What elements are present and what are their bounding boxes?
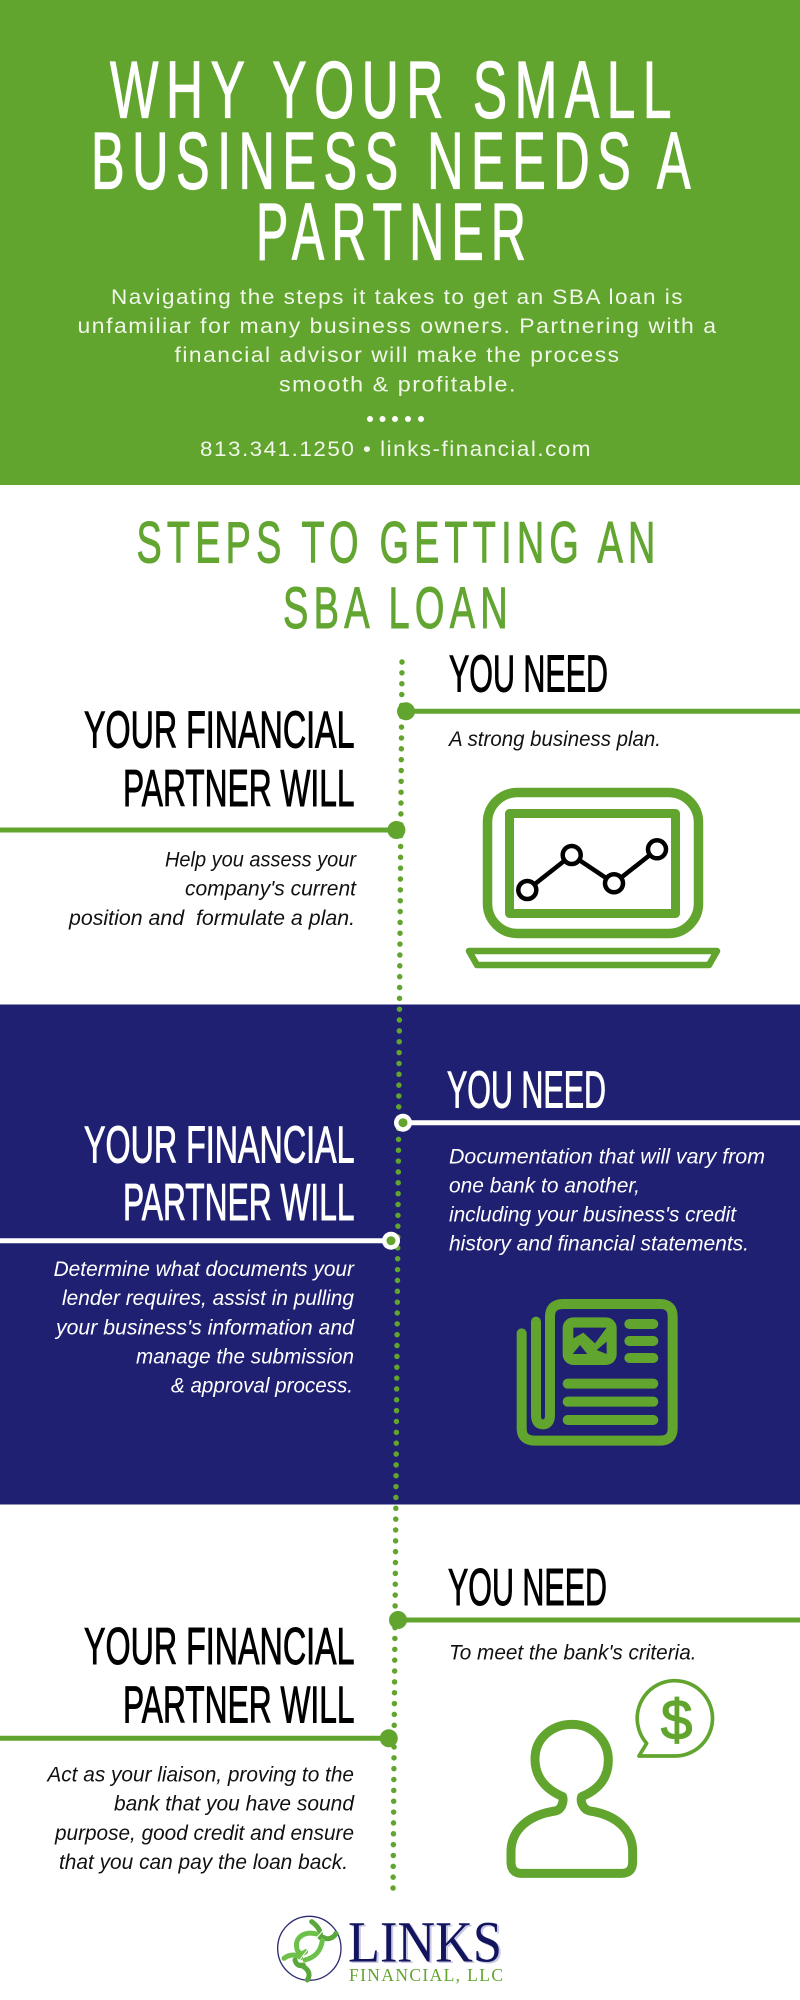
- intro text: [78, 286, 717, 396]
- step 3: your financial partner will: bank that you have sound: [114, 1792, 355, 1816]
- step 3: your financial partner will: PARTNER WILL: [123, 1676, 354, 1734]
- step 3: you need: [389, 1559, 800, 1664]
- step 2: you need: Documentation that will vary from: [449, 1144, 765, 1168]
- logo wordmark: LINKS: [350, 1911, 504, 1976]
- step 1: your financial partner will: [0, 702, 405, 930]
- step 2: your financial partner will: Determine what documents your: [54, 1257, 355, 1281]
- step 1: you need: A strong business plan.: [447, 727, 661, 751]
- step 1: your financial partner will: position and formulate a plan.: [68, 906, 355, 930]
- icon: person with dollar speech bubble: $: [661, 1689, 692, 1752]
- intro text: smooth & profitable.: [279, 374, 517, 396]
- step 2: you need: including your business's credit: [449, 1203, 737, 1227]
- step 3: your financial partner will: Act as your liaison, proving to the: [45, 1763, 354, 1787]
- icon: newspaper document: [522, 1304, 673, 1441]
- intro text: unfamiliar for many business owners. Partnering with a: [78, 315, 717, 338]
- intro text: Navigating the steps it takes to get an SBA loan is: [111, 286, 684, 309]
- step 1: you need: YOU NEED: [449, 646, 608, 704]
- step 2: your financial partner will: & approval process.: [171, 1374, 353, 1398]
- title: [91, 46, 698, 278]
- section heading: [136, 510, 660, 641]
- icon: person with dollar speech bubble: [511, 1681, 713, 1873]
- step 1: your financial partner will: PARTNER WILL: [123, 760, 354, 818]
- dot divider: [367, 416, 424, 422]
- logo: Links Financial: LINKS: [348, 1910, 502, 1975]
- step 2: your financial partner will: YOUR FINANCIAL: [84, 1116, 354, 1174]
- title: PARTNER: [256, 188, 533, 278]
- step 2: you need: YOU NEED: [447, 1061, 606, 1119]
- step 3: your financial partner will: purpose, good credit and ensure: [54, 1821, 354, 1845]
- step 1: your financial partner will: company's current: [185, 876, 357, 900]
- intro text: financial advisor will make the process: [174, 344, 620, 367]
- step 2: your financial partner will: lender requires, assist in pulling: [62, 1286, 354, 1310]
- step 1: your financial partner will: Help you assess your: [165, 848, 357, 872]
- step 2: you need: [394, 1061, 800, 1256]
- contact line: 813.341.1250 • links-financial.com: [200, 438, 592, 461]
- step 1: you need: [397, 646, 800, 751]
- logo: Links Financial: FINANCIAL, LLC: [349, 1965, 503, 1985]
- step 2: your financial partner will: your business's information and: [54, 1315, 355, 1339]
- step 3: your financial partner will: [0, 1618, 398, 1874]
- step 3: your financial partner will: YOUR FINANCIAL: [84, 1618, 354, 1676]
- step 2: you need: one bank to another,: [449, 1174, 640, 1198]
- logo chain emblem: [278, 1916, 341, 1980]
- dotted timeline: [393, 662, 402, 1896]
- step 3: your financial partner will: that you can pay the loan back.: [59, 1850, 348, 1874]
- step 2: your financial partner will: PARTNER WILL: [123, 1174, 354, 1232]
- icon: laptop with chart: [469, 792, 717, 965]
- step 3: you need: To meet the bank's criteria.: [449, 1640, 696, 1664]
- panel: header banner: [0, 0, 800, 485]
- panel: navy step background: [0, 1004, 800, 1504]
- step 2: your financial partner will: [0, 1116, 400, 1398]
- logo: Links Financial: [278, 1910, 504, 1985]
- step 2: your financial partner will: manage the submission: [136, 1344, 354, 1368]
- step 1: your financial partner will: YOUR FINANCIAL: [84, 702, 354, 760]
- step 2: you need: history and financial statements.: [449, 1232, 749, 1256]
- section heading: SBA LOAN: [283, 576, 513, 641]
- step 3: you need: YOU NEED: [448, 1559, 607, 1617]
